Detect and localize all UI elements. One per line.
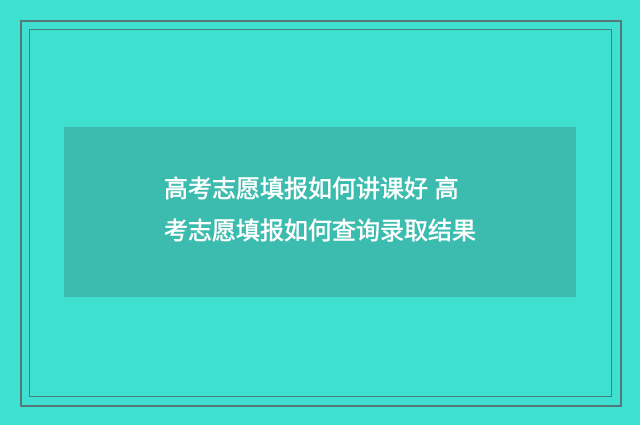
title line 1: 高考志愿填报如何讲课好 高: [164, 176, 459, 203]
panel: title banner: [64, 127, 576, 297]
title line 2: 考志愿填报如何查询录取结果: [164, 218, 476, 245]
inner frame: [29, 29, 612, 397]
